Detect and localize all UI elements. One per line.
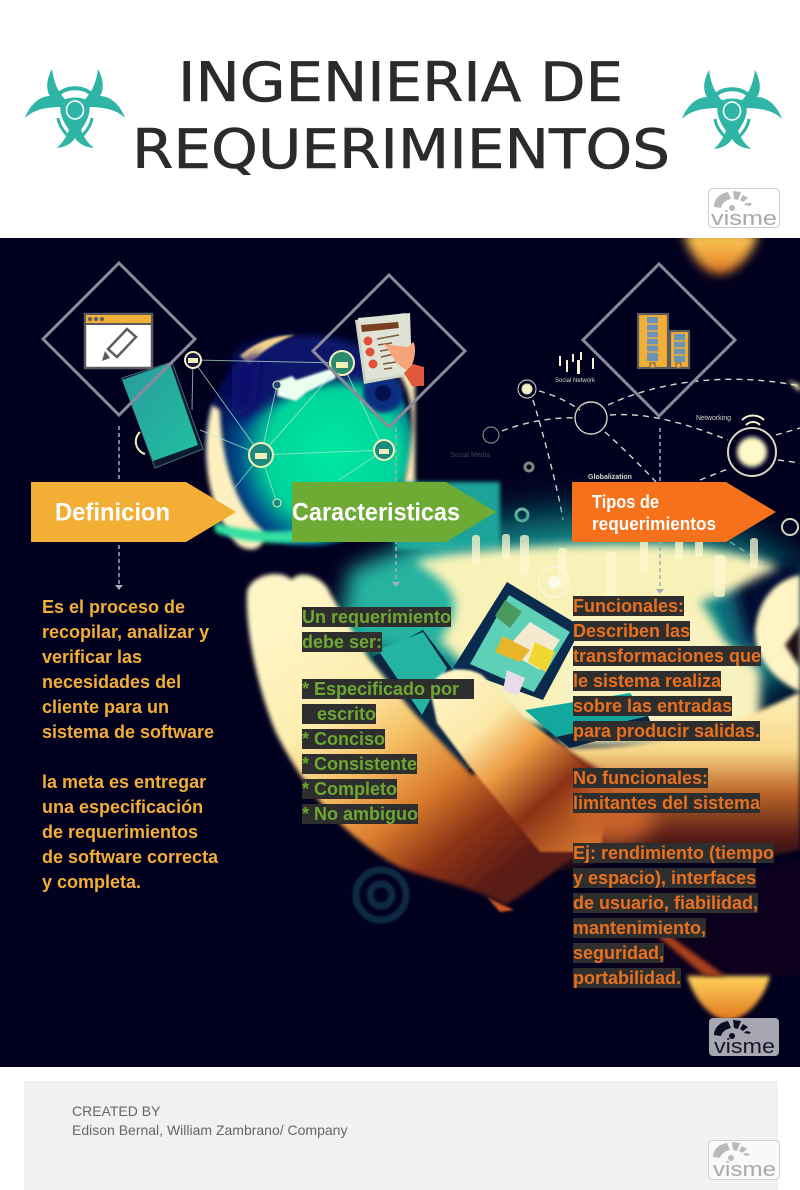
text: tipos de requerimientos: sobre las entradas <box>573 696 732 716</box>
text: tipos de requerimientos: y espacio), interfaces <box>573 868 756 888</box>
logo: visme footer: visme <box>713 1159 776 1181</box>
people silhouettes <box>472 534 758 598</box>
cream right side background <box>560 605 760 745</box>
text: tipos de requerimientos: portabilidad. <box>573 968 681 988</box>
network glow <box>737 437 767 467</box>
text: caracteristicas: * Consistente <box>302 754 417 774</box>
background photo: Social Network <box>555 378 596 384</box>
arrow: tipos de requerimientos: requerimientos <box>592 514 716 534</box>
title: REQUERIMIENTOS <box>132 118 670 181</box>
background photo: Social Media <box>450 452 490 459</box>
dark device under fingers <box>373 630 471 770</box>
text: definicion: la meta es entregar <box>42 772 206 792</box>
left fingers and palm <box>247 574 630 905</box>
top flame <box>684 232 758 274</box>
icon: checklist <box>355 313 424 386</box>
arrow: caracteristicas: Caracteristicas <box>292 498 460 526</box>
text: tipos de requerimientos: seguridad, <box>573 943 664 963</box>
text: caracteristicas: * Especificado por <box>302 679 459 699</box>
globe <box>136 335 415 549</box>
text: caracteristicas: debe ser: <box>302 632 382 652</box>
text: tipos de requerimientos: transformaciones que <box>573 646 761 666</box>
text: caracteristicas: * No ambiguo <box>302 804 418 824</box>
lower right tint band <box>590 860 800 976</box>
network dashed arcs <box>502 379 800 580</box>
text: definicion: cliente para un <box>42 697 169 717</box>
background photo: Networking <box>696 415 731 422</box>
arrow: tipos de requerimientos: Tipos de <box>592 492 659 512</box>
dashed connector: definicion <box>115 426 123 590</box>
watermark spiral <box>356 870 406 920</box>
social group <box>559 352 594 374</box>
bottom flame <box>687 976 770 1020</box>
text: definicion: Es el proceso de <box>42 597 185 617</box>
background photo: Globalization <box>588 474 632 481</box>
flat device <box>525 693 648 737</box>
icon: edit window <box>85 314 152 368</box>
text: tipos de requerimientos: de usuario, fiabilidad, <box>573 893 758 913</box>
arrow: tipos de requerimientos <box>572 482 776 542</box>
diamond: definicion <box>43 263 195 415</box>
text: definicion: y completa. <box>42 872 141 892</box>
text: definicion: de software correcta <box>42 847 218 867</box>
text: tipos de requerimientos: No funcionales: <box>573 768 708 788</box>
icon: biohazard left <box>25 69 125 148</box>
text: definicion: de requerimientos <box>42 822 198 842</box>
hand shadow slivers <box>654 938 726 979</box>
footer credit: Edison Bernal, William Zambrano/ Company <box>72 1122 347 1138</box>
text: tipos de requerimientos <box>573 596 774 988</box>
text: definicion: sistema de software <box>42 722 214 742</box>
right hand <box>560 692 800 872</box>
text: caracteristicas: escrito <box>317 704 376 724</box>
teal glow behind city <box>360 515 800 725</box>
palm glow <box>575 787 655 843</box>
logo: visme header: visme <box>711 208 777 230</box>
text: caracteristicas: * Conciso <box>302 729 385 749</box>
phone <box>122 362 203 468</box>
icon: biohazard right <box>682 70 782 149</box>
text: caracteristicas: * Completo <box>302 779 397 799</box>
footer credit: CREATED BY <box>72 1103 160 1119</box>
logo: visme on photo <box>709 1018 779 1058</box>
arrow: caracteristicas <box>292 482 496 542</box>
arrow: definicion: Definicion <box>55 498 170 526</box>
text: definicion: recopilar, analizar y <box>42 622 209 642</box>
title: INGENIERIA DE <box>178 51 623 114</box>
diamond: caracteristicas <box>313 275 465 427</box>
text: tipos de requerimientos: le sistema realiza <box>573 671 721 691</box>
background photo <box>0 232 800 1067</box>
city cream band <box>415 544 778 725</box>
footer panel <box>24 1081 778 1190</box>
text: tipos de requerimientos: Funcionales: <box>573 596 684 616</box>
text: tipos de requerimientos: Describen las <box>573 621 690 641</box>
dashed connector: tipos <box>656 428 664 594</box>
thumb <box>430 670 610 852</box>
spiral near diamond <box>363 373 403 413</box>
text: tipos de requerimientos: Ej: rendimiento (tiempo <box>573 843 774 863</box>
text: tipos de requerimientos: limitantes del sistema <box>573 793 760 813</box>
title <box>132 51 670 181</box>
tablet <box>453 582 582 700</box>
text: tipos de requerimientos: mantenimiento, <box>573 918 706 938</box>
icon: buildings <box>638 314 689 368</box>
footer credit <box>72 1103 348 1138</box>
second phone <box>378 632 447 715</box>
text: tipos de requerimientos: para producir salidas. <box>573 721 760 741</box>
text: definicion: verificar las <box>42 647 142 667</box>
text: definicion <box>42 597 218 892</box>
text: definicion: necesidades del <box>42 672 181 692</box>
text: caracteristicas: Un requerimiento <box>302 607 451 627</box>
dashed connector: caracteristicas <box>392 428 400 587</box>
logo: visme footer <box>708 1140 780 1181</box>
text: definicion: una especificación <box>42 797 203 817</box>
arrow: definicion <box>31 482 236 542</box>
diamond: tipos <box>583 264 735 416</box>
text: caracteristicas <box>302 607 474 824</box>
logo: visme on photo: visme <box>714 1036 775 1058</box>
logo: visme header <box>708 188 780 230</box>
